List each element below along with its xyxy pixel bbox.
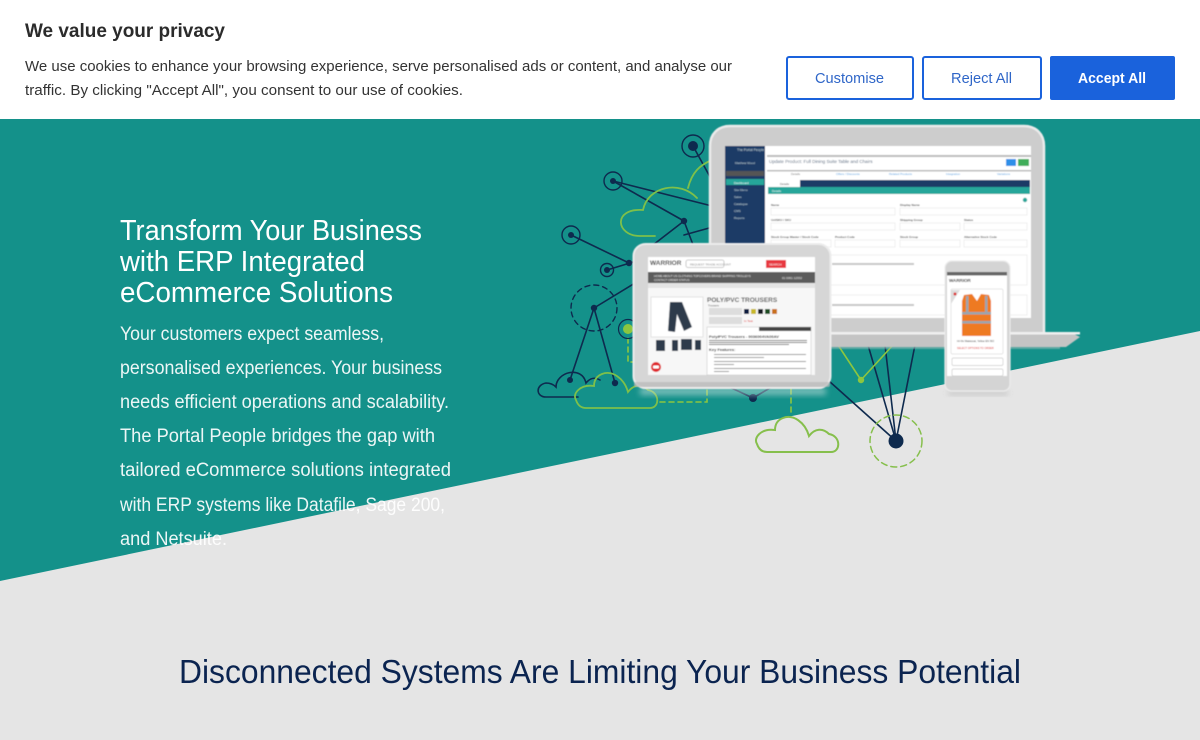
cloud: green upper (621, 160, 712, 236)
banner background (0, 0, 1200, 119)
laptop form: Url/SKU / SKU (771, 218, 791, 222)
hero body text: with ERP systems like Datafile, Sage 200, (119, 495, 445, 516)
device: laptop (660, 126, 1080, 349)
laptop tab bar (800, 180, 1030, 187)
device: laptop: Catalogue (734, 202, 748, 206)
laptop form: Status (964, 218, 974, 222)
device: laptop: CMS (734, 209, 741, 213)
laptop lid (710, 126, 1044, 336)
button: customise: Customise (815, 70, 884, 87)
teal hero panel (0, 119, 1200, 581)
tablet nav (648, 272, 815, 283)
hero heading: with ERP Integrated (119, 246, 365, 278)
button: reject all: Reject All (951, 70, 1012, 87)
hero body text (119, 324, 451, 550)
device: tablet: 01 0061 12332 (782, 276, 802, 280)
button: customise (787, 57, 913, 99)
laptop form: Display Name (900, 203, 920, 207)
cloud: green lower left (575, 373, 657, 408)
hero heading: eCommerce Solutions (120, 277, 393, 309)
tablet product photo (651, 297, 703, 337)
device: tablet: Trousers (708, 304, 720, 308)
hero body text: Your customers expect seamless, (120, 324, 384, 345)
tablet description (707, 327, 811, 375)
tablet body (634, 244, 830, 388)
laptop form: Product Code (835, 235, 855, 239)
cloud: dark lower left (538, 372, 600, 397)
device: tablet: REQUEST TRADE ACCOUNT (690, 262, 731, 266)
cloud: green lower right (756, 417, 838, 452)
device: laptop: Details (772, 189, 782, 193)
device: tablet (634, 244, 830, 395)
tablet product title: POLY/PVC TROUSERS (707, 297, 778, 304)
laptop base (660, 333, 1080, 347)
banner text: traffic. By clicking "Accept All", you consent to our use of cookies. (25, 82, 463, 99)
section heading: Disconnected Systems Are Limiting Your Business Potential (179, 654, 1021, 691)
banner text: We use cookies to enhance your browsing experience, serve personalised ads or content, and analyse our (25, 58, 732, 75)
device: laptop: Variations (997, 172, 1011, 176)
device: laptop: Update Product: Full Dining Suite Table and Chairs (769, 159, 873, 164)
device: phone: Hi-Vis Waistcoat, Yellow EN ISO (957, 339, 994, 343)
dashed green links (628, 338, 791, 416)
network illustration (538, 135, 922, 467)
laptop sidebar (725, 146, 765, 318)
device: laptop: The Portal People (737, 148, 764, 152)
node rings (562, 135, 704, 331)
tablet screen (648, 257, 815, 375)
laptop form: Alternative Stock Code (964, 235, 997, 239)
device: laptop: Site Menu (734, 188, 748, 192)
phone body (945, 261, 1010, 391)
hero body text: needs efficient operations and scalability. (120, 392, 449, 413)
device: laptop: Dashboard (734, 181, 749, 185)
laptop form: Shipping Group (900, 218, 923, 222)
hero heading: Transform Your Business (120, 215, 422, 247)
laptop screen (725, 146, 1031, 318)
laptop form: Name (771, 203, 780, 207)
laptop editor toolbars (832, 263, 914, 265)
phone buttons (952, 358, 1003, 366)
device: phone: WARRIOR (949, 278, 971, 283)
dashed green ring (870, 415, 922, 467)
device: laptop: Matthew Wood (735, 161, 755, 165)
laptop form: Stock Group Master / Stock Code (771, 235, 819, 239)
button: accept all: Accept All (1078, 70, 1146, 87)
device: tablet: Poly/PVC Trousers - 0036004VA00AV (709, 334, 779, 339)
device: laptop: Details (791, 172, 801, 176)
tablet shadow (640, 388, 826, 395)
tablet thumbnails (656, 339, 701, 351)
green links (838, 345, 893, 380)
hero body text: tailored eCommerce solutions integrated (120, 460, 451, 481)
device: tablet: SEARCH (769, 262, 782, 266)
phone product card (951, 289, 1003, 354)
hero body text: and Netsuite. (120, 529, 227, 550)
device: laptop: Sales (734, 195, 742, 199)
device: laptop: Details (780, 182, 790, 186)
hero body text: personalised experiences. Your business (120, 358, 442, 379)
device: laptop: Offers / Discounts (836, 172, 860, 176)
network lines (570, 146, 915, 441)
button: reject all (923, 57, 1041, 99)
laptop form: Stock Group (900, 235, 918, 239)
device: tablet: CONTACT ORDER STATUS (654, 278, 690, 282)
network nodes (567, 141, 904, 448)
tablet chat icon (651, 362, 661, 372)
device: tablet: In Test (744, 319, 753, 323)
phone screen (947, 272, 1007, 376)
banner text (25, 58, 732, 99)
green ring node (618, 320, 638, 338)
laptop form (771, 203, 997, 239)
icon: hi-vis vest (962, 294, 991, 336)
phone shadow (948, 391, 1008, 395)
device: laptop: Related Products (889, 172, 913, 176)
hero body text: The Portal People bridges the gap with (120, 426, 435, 447)
green node (858, 377, 864, 383)
device: tablet: HOME ABOUT US CLOTHING TOPCOVERS BRAND SHIPPING TROLLEYS (654, 274, 751, 278)
device: laptop: Reports (734, 216, 745, 220)
hero heading (119, 215, 422, 309)
device: tablet: WARRIOR (650, 260, 682, 267)
device: laptop: Integration (946, 172, 961, 176)
laptop page header (767, 155, 1031, 157)
cookie banner (0, 0, 1200, 119)
banner title: We value your privacy (25, 21, 225, 42)
device: phone (945, 261, 1010, 395)
device: phone: SELECT OPTIONS TO ORDER (957, 346, 994, 350)
device: tablet: Key Features: (709, 347, 735, 352)
button: accept all (1050, 56, 1175, 100)
tablet colour swatches (744, 309, 749, 314)
